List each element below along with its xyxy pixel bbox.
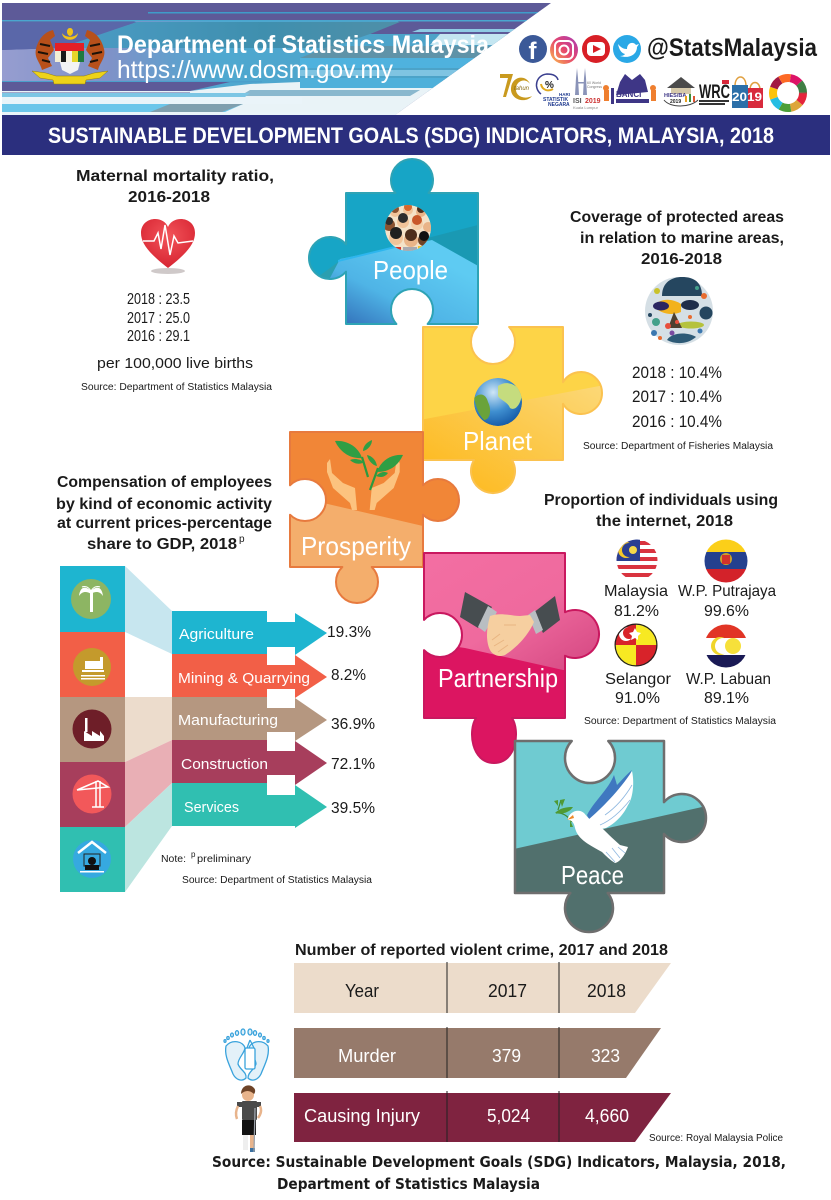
- puzzle piece: people: [308, 158, 479, 325]
- icon: crowd of people: [385, 205, 431, 251]
- values: [127, 291, 190, 345]
- bar: agriculture: 19.3%: [327, 624, 371, 641]
- panel: internet use: [544, 492, 778, 727]
- flag: malaysia: [616, 540, 658, 577]
- row: year: 2017: [488, 981, 527, 1001]
- row: causing injury: Causing Injury: [304, 1106, 420, 1126]
- icon: factory: [72, 710, 112, 748]
- heading: Compensation of employees: [57, 474, 272, 491]
- flag: labuan: [706, 624, 746, 668]
- bar: construction: Construction: [181, 756, 268, 773]
- bar: services: Services: [184, 799, 239, 816]
- source: Source: Department of Statistics Malaysia: [81, 382, 272, 393]
- logo: isi 2019: 2019: [585, 98, 601, 105]
- bar: agriculture: Agriculture: [179, 626, 254, 643]
- icon: feet with toe tag: [224, 1029, 269, 1080]
- values: 2016 : 10.4%: [632, 412, 722, 431]
- source: Source: Department of Statistics Malaysia: [584, 716, 776, 727]
- icon: services: [73, 840, 111, 878]
- logo: isi 2019: [573, 68, 602, 110]
- source: Source: Department of Statistics Malaysia: [182, 875, 372, 886]
- heading: 2016-2018: [128, 189, 210, 206]
- puzzle piece: partnership: [423, 552, 600, 764]
- row: causing injury: [294, 1093, 671, 1142]
- bar: construction: 72.1%: [331, 756, 375, 773]
- row: causing injury: 5,024: [487, 1106, 530, 1126]
- logo: 70 tahun: [500, 74, 532, 100]
- icon: palm tree: [71, 579, 111, 619]
- state emblem: [32, 28, 108, 84]
- values: 2016 : 29.1: [127, 328, 190, 345]
- icon: facebook: [519, 35, 547, 65]
- icon: hands and plant: [327, 440, 403, 510]
- bar: mining and quarrying: [172, 654, 366, 698]
- logo: sdg wheel: [773, 78, 803, 108]
- logo: wrc 2019: WRC: [699, 82, 730, 103]
- row: year: 2018: [587, 981, 626, 1001]
- logo: banci malaysia: BANCI: [616, 90, 641, 99]
- label: People: [373, 255, 448, 285]
- label: Planet: [463, 426, 533, 456]
- values: 2018 : 10.4%: [632, 363, 722, 382]
- note: preliminary: [197, 854, 251, 865]
- icon: crane: [72, 774, 112, 814]
- label: Peace: [561, 860, 624, 890]
- heading: by kind of economic activity: [56, 496, 272, 513]
- heading: the internet, 2018: [596, 513, 733, 530]
- icon: dove: [554, 770, 633, 863]
- logo: hari statistik negara: NEGARA: [548, 102, 570, 108]
- bar: services: 39.5%: [331, 800, 375, 817]
- country labels: 99.6%: [704, 603, 749, 620]
- panel: compensation of employees: [56, 474, 375, 892]
- logo: isi 2019: Congress: [587, 85, 602, 89]
- header banner: [2, 3, 562, 120]
- bar: manufacturing: Manufacturing: [178, 712, 278, 729]
- heading: Proportion of individuals using: [544, 492, 778, 509]
- bar: mining and quarrying: 8.2%: [331, 667, 366, 684]
- heading: 2016-2018: [641, 251, 722, 268]
- heading: p: [239, 534, 245, 545]
- heading: [76, 168, 274, 206]
- icon: injured boy: [236, 1085, 261, 1152]
- column dividers: [447, 962, 559, 1142]
- note: Note:: [161, 854, 186, 865]
- puzzle piece: peace: [514, 740, 708, 934]
- values: 2018 : 23.5: [127, 291, 190, 308]
- logo: 70 tahun: tahun: [514, 86, 530, 92]
- department name: Department of Statistics Malaysia: [117, 31, 490, 59]
- logo: wrc 2019: [699, 77, 763, 108]
- footer source: [212, 1153, 786, 1193]
- social media icons: [519, 34, 818, 65]
- logo: isi 2019: 60 World: [587, 81, 601, 85]
- logo: hies 2019: 2019: [670, 99, 681, 105]
- logo: hari statistik negara: %: [545, 80, 554, 91]
- row: murder: 323: [591, 1046, 620, 1066]
- flag: selangor: [614, 623, 658, 667]
- logo: hari statistik negara: HARI: [559, 92, 570, 97]
- bar: services: [172, 783, 375, 828]
- heading: [56, 474, 272, 553]
- icon: twitter: [613, 35, 641, 63]
- icon: marine life: [645, 277, 713, 345]
- flag: putrajaya: [704, 539, 748, 584]
- country labels: [604, 583, 776, 707]
- heading: Coverage of protected areas: [570, 209, 784, 226]
- unit: per 100,000 live births: [97, 355, 253, 372]
- bar: agriculture: [172, 611, 371, 655]
- label: Prosperity: [301, 531, 411, 561]
- logo: wrc 2019: 2019: [732, 90, 762, 104]
- row: causing injury: 4,660: [585, 1106, 629, 1126]
- values: 2017 : 25.0: [127, 310, 190, 327]
- row: murder: Murder: [338, 1046, 396, 1066]
- website: https://www.dosm.gov.my: [117, 56, 393, 84]
- logo: isi 2019: Kuala Lumpur: [573, 105, 599, 110]
- source: Source: Department of Fisheries Malaysia: [583, 441, 773, 452]
- puzzle piece: planet: [422, 326, 603, 494]
- heading: Number of reported violent crime, 2017 and 2018: [295, 942, 668, 959]
- row: murder: 379: [492, 1046, 521, 1066]
- icon: youtube: [582, 35, 610, 63]
- logo: hari statistik negara: [536, 74, 570, 108]
- partner logos: [500, 68, 803, 110]
- puzzle piece: prosperity: [289, 431, 460, 604]
- bar: manufacturing: [172, 697, 375, 741]
- icon: facebook: f: [528, 38, 538, 65]
- bar: manufacturing: 36.9%: [331, 716, 375, 733]
- country labels: Malaysia: [604, 583, 668, 600]
- row: murder: [294, 1028, 661, 1078]
- heading: in relation to marine areas,: [580, 230, 784, 247]
- logo: isi 2019: ISI: [573, 98, 582, 105]
- note: p: [191, 850, 196, 859]
- bar: construction: [172, 740, 375, 785]
- footer source: Source: Sustainable Development Goals (SDG) Indicators, Malaysia, 2018,: [212, 1153, 786, 1171]
- row: year: [294, 963, 671, 1013]
- bar: mining and quarrying: Mining & Quarrying: [178, 670, 310, 687]
- country labels: W.P. Labuan: [686, 671, 771, 688]
- panel: maternal mortality: [76, 168, 274, 393]
- icon: oil rig: [73, 648, 111, 686]
- panel: marine protected areas: [570, 209, 784, 452]
- values: [632, 363, 722, 431]
- icon column: [60, 566, 125, 892]
- logo: hari statistik negara: STATISTIK: [543, 97, 568, 103]
- icon: heart: [141, 219, 195, 274]
- country labels: Selangor: [605, 671, 672, 688]
- source: Source: Royal Malaysia Police: [649, 1133, 783, 1144]
- country labels: W.P. Putrajaya: [678, 583, 776, 600]
- label: Partnership: [438, 663, 558, 693]
- icon: instagram: [550, 36, 578, 64]
- icon: globe: [474, 378, 522, 426]
- heading: Maternal mortality ratio,: [76, 168, 274, 185]
- country labels: 81.2%: [614, 603, 659, 620]
- heading: [544, 492, 778, 530]
- footer source: Department of Statistics Malaysia: [277, 1175, 540, 1193]
- title bar: [2, 115, 830, 155]
- row: year: Year: [345, 981, 379, 1001]
- values: 2017 : 10.4%: [632, 387, 722, 406]
- heading: [570, 209, 784, 268]
- logo: banci malaysia: [603, 74, 656, 104]
- panel: violent crime table: [224, 942, 783, 1152]
- note: [161, 850, 251, 865]
- icon: handshake: [460, 592, 560, 656]
- logo: hies 2019: [664, 77, 698, 106]
- connectors: [125, 566, 172, 892]
- logo: hies 2019: HIES/BA: [664, 93, 686, 99]
- country labels: 89.1%: [704, 690, 749, 707]
- heading: at current prices-percentage: [57, 515, 272, 532]
- country labels: 91.0%: [615, 690, 660, 707]
- heading: share to GDP, 2018: [87, 536, 237, 553]
